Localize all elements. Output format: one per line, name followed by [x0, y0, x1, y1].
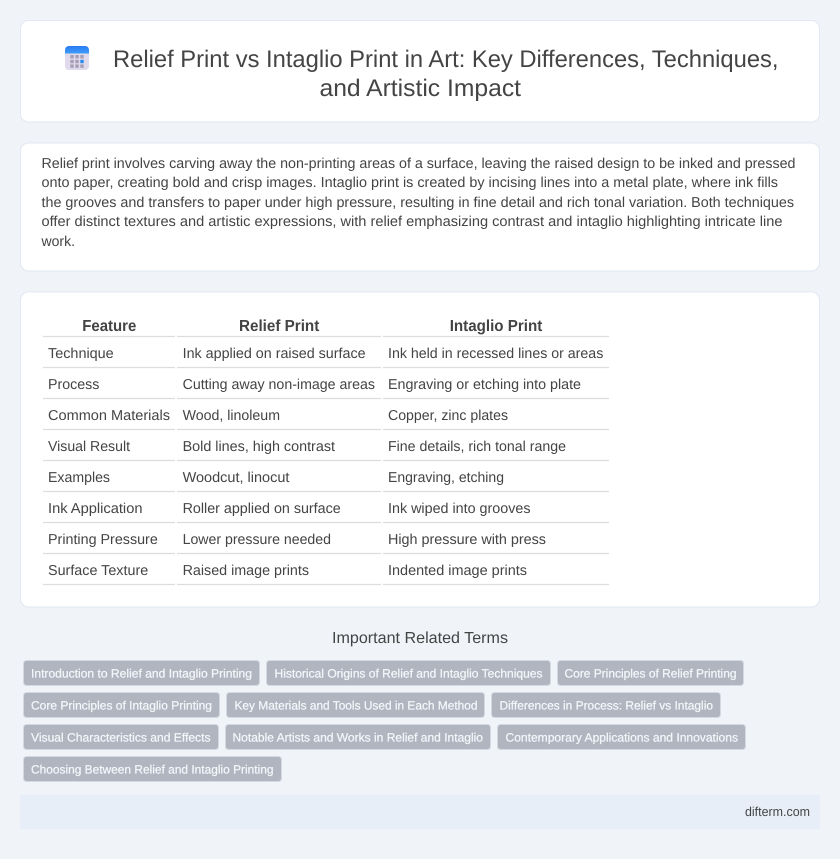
- tag: [24, 660, 260, 686]
- row: Ink Application: Ink Application: [48, 501, 142, 517]
- table header: [82, 318, 543, 335]
- row: Technique: Ink held in recessed lines or areas: [388, 346, 603, 362]
- row: Ink Application: Roller applied on surface: [183, 501, 341, 517]
- row: Surface Texture: [48, 563, 527, 579]
- table header: Relief Print: [239, 318, 320, 335]
- tag: Key Materials and Tools Used in Each Method: [234, 698, 478, 712]
- panel: description: [20, 143, 820, 271]
- icon: calendar: [65, 46, 89, 70]
- row: Process: Process: [48, 377, 99, 393]
- tag: Core Principles of Relief Printing: [564, 666, 736, 680]
- tag: [24, 692, 220, 718]
- panel: comparison table: [20, 292, 820, 607]
- row: Visual Result: Fine details, rich tonal range: [388, 439, 566, 455]
- title: [113, 46, 778, 102]
- text block: description: the grooves and transfers to paper under high pressure, resulting in fine detail and rich tonal variation. Both techniques: [42, 195, 794, 211]
- row: Examples: Examples: [48, 470, 110, 486]
- panel: header card: [20, 20, 820, 122]
- row: Surface Texture: Surface Texture: [48, 563, 148, 579]
- table header: Intaglio Print: [450, 318, 543, 335]
- tag: [498, 724, 746, 750]
- text block: description: [41, 156, 796, 250]
- row: Technique: [48, 346, 603, 362]
- tag: Choosing Between Relief and Intaglio Printing: [31, 762, 274, 776]
- row: Examples: Engraving, etching: [388, 470, 504, 486]
- row: Printing Pressure: High pressure with press: [388, 532, 546, 548]
- row: Surface Texture: Raised image prints: [183, 563, 309, 579]
- row: Common Materials: Common Materials: [48, 408, 170, 424]
- text block: description: offer distinct textures and artistic expressions, with relief emphasizing contrast and intaglio highlighting intricate line: [42, 214, 782, 230]
- tag: Visual Characteristics and Effects: [31, 730, 210, 744]
- tag: [492, 692, 720, 718]
- row: Printing Pressure: Lower pressure needed: [183, 532, 331, 548]
- row: Examples: [48, 470, 504, 486]
- tag: Notable Artists and Works in Relief and Intaglio: [232, 730, 483, 744]
- row: Process: Cutting away non-image areas: [183, 377, 375, 393]
- tag: Historical Origins of Relief and Intaglio Techniques: [274, 666, 542, 680]
- text block: description: work.: [41, 234, 75, 250]
- tag: [226, 724, 490, 750]
- tag: [266, 660, 550, 686]
- row: Examples: Woodcut, linocut: [183, 470, 289, 486]
- tag: [226, 692, 484, 718]
- row: Common Materials: Wood, linoleum: [183, 408, 280, 424]
- row: Ink Application: [48, 501, 530, 517]
- row: Ink Application: Ink wiped into grooves: [388, 501, 530, 517]
- row: Visual Result: [48, 439, 566, 455]
- tag: Core Principles of Intaglio Printing: [31, 698, 212, 712]
- text block: description: onto paper, creating bold and crisp images. Intaglio print is created by incising lines into a metal plate, where ink fills: [42, 175, 778, 191]
- row: Process: Engraving or etching into plate: [388, 377, 581, 393]
- footer: [20, 795, 820, 829]
- table header: Feature: [82, 318, 136, 335]
- tag: Differences in Process: Relief vs Intaglio: [500, 698, 713, 712]
- row: Visual Result: Visual Result: [48, 439, 130, 455]
- row: Technique: Technique: [48, 346, 114, 362]
- row: Common Materials: [48, 408, 508, 424]
- tag: Introduction to Relief and Intaglio Printing: [31, 666, 252, 680]
- tag: [558, 660, 744, 686]
- footer: difterm.com: [745, 804, 810, 819]
- row: Printing Pressure: [48, 532, 546, 548]
- row: Printing Pressure: Printing Pressure: [48, 532, 158, 548]
- title: and Artistic Impact: [320, 75, 521, 102]
- row: Process: [48, 377, 581, 393]
- title: Relief Print vs Intaglio Print in Art: Key Differences, Techniques,: [113, 46, 778, 73]
- panel: related term tags: [24, 660, 746, 782]
- row: Visual Result: Bold lines, high contrast: [183, 439, 335, 455]
- tag: [24, 756, 282, 782]
- heading: related terms: Important Related Terms: [332, 630, 508, 647]
- row: Surface Texture: Indented image prints: [388, 563, 527, 579]
- tag: Contemporary Applications and Innovations: [506, 730, 738, 744]
- row: Technique: Ink applied on raised surface: [183, 346, 366, 362]
- tag: [24, 724, 218, 750]
- text block: description: Relief print involves carving away the non-printing areas of a surface, leaving the raised design to be inked and pressed: [42, 156, 796, 172]
- row: Common Materials: Copper, zinc plates: [388, 408, 508, 424]
